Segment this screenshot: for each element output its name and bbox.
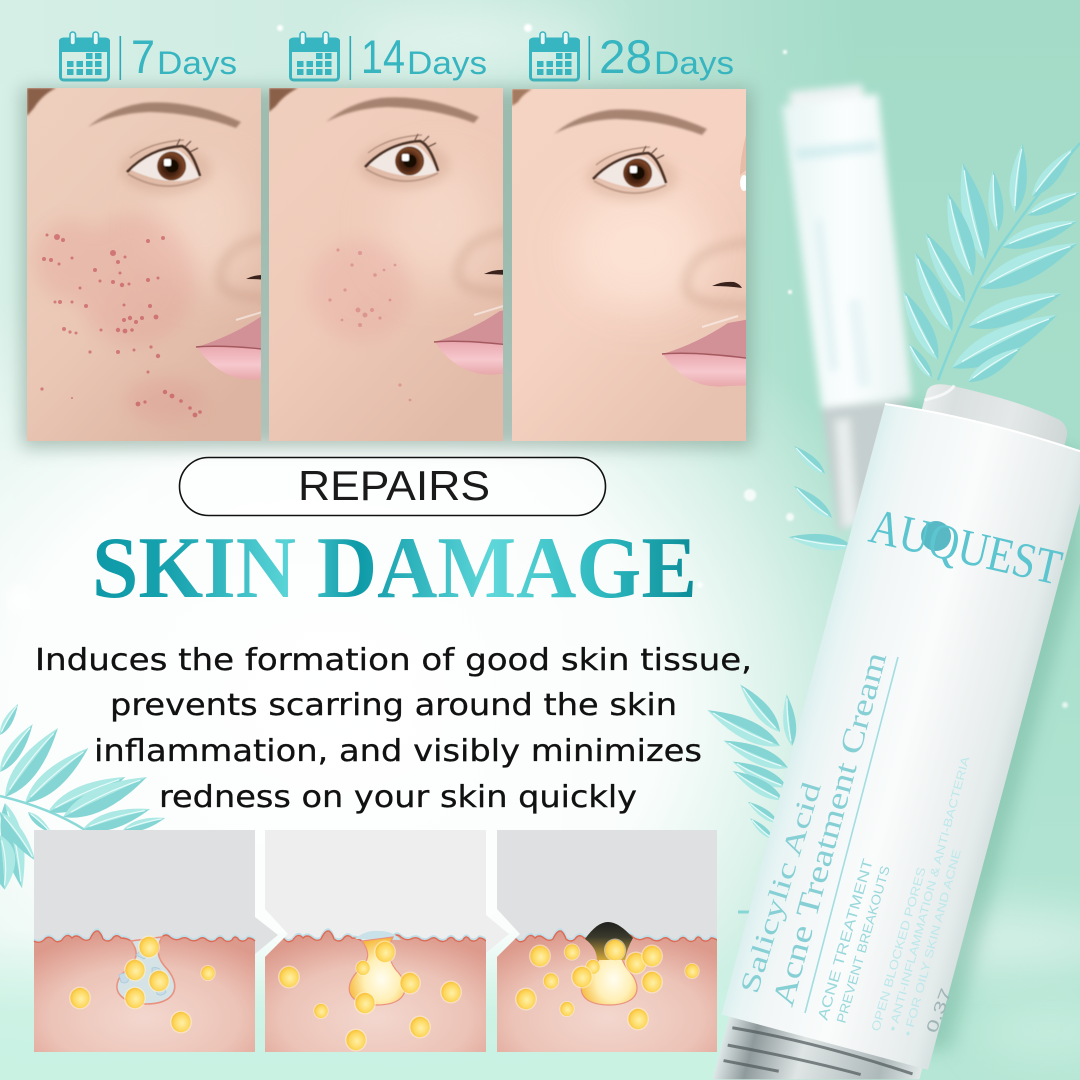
photo: 7 days, acne skin <box>27 88 261 441</box>
description text: inflammation, and visibly minimizes <box>94 734 702 769</box>
acne spots <box>40 234 202 417</box>
blurred background bottle <box>782 84 912 532</box>
bottle small text: PREVENT BREAKOUTS <box>833 864 893 1025</box>
day 14 label: Days <box>407 45 487 81</box>
bottle text: product name: Acne Treatment Cream <box>765 648 893 1010</box>
photo: 14 days, fading marks <box>269 88 503 441</box>
bottle small text: 0.37 <box>924 986 956 1035</box>
bottle text: product name <box>734 648 893 1010</box>
oil droplets <box>515 938 700 1030</box>
faded spots <box>328 248 411 401</box>
black plug <box>585 922 633 960</box>
oil droplets <box>278 940 462 1052</box>
day 14 label: 14 <box>361 30 405 83</box>
description text: redness on your skin quickly <box>159 780 637 815</box>
day 28 label: 28 <box>599 30 652 83</box>
yellow pore <box>349 937 405 1005</box>
photo: 28 days, clear skin <box>512 89 761 441</box>
leaves behind blurred bottle <box>788 442 853 554</box>
palm leaf, top right <box>895 142 1080 388</box>
day 7 label: 7 <box>131 30 155 83</box>
day 14 label <box>289 30 487 83</box>
yellow pore <box>581 937 637 1005</box>
badge: repairs: REPAIRS <box>298 462 490 509</box>
oil droplets <box>69 936 216 1034</box>
bottle small text: ACNE TREATMENT <box>815 857 877 1022</box>
logo mark <box>921 521 951 551</box>
palm leaves beside main bottle <box>703 680 798 912</box>
bottle small text: • ANTI-INFLAMMATION & ANTI-BACTERIA <box>887 755 973 1033</box>
pore filled with debris <box>117 937 175 1004</box>
badge: repairs <box>180 458 606 516</box>
bottle small text: • FOR OILY SKIN AND ACNE <box>902 848 964 1038</box>
palm leaf, lower left <box>0 702 167 891</box>
bottle small text: OPEN BLOCKED PORES <box>868 866 929 1033</box>
diagram panel 2: oil filled pore <box>265 830 509 1052</box>
bottle divider line <box>805 657 898 1013</box>
description text: Induces the formation of good skin tissue, <box>35 643 752 678</box>
description text: prevents scarring around the skin <box>110 688 677 723</box>
title: skin damage: SKIN DAMAGE <box>92 520 697 617</box>
bottle text: product name: Salicylic Acid <box>734 778 827 997</box>
day 7 label: Days <box>157 45 237 81</box>
day 28 label: Days <box>654 45 734 81</box>
main product bottle <box>705 369 1080 1080</box>
day 7 label <box>59 30 237 83</box>
diagram panel 1: clogged pore <box>34 830 278 1052</box>
description text <box>35 643 752 815</box>
photo shadow <box>22 88 752 448</box>
bottle label body <box>721 397 1080 1070</box>
bottle shadow <box>900 400 1080 1050</box>
bottle cap <box>920 379 1072 454</box>
glass base <box>712 1010 924 1080</box>
diagram panel 3: blackhead forming <box>497 830 718 1052</box>
day 28 label <box>529 30 734 83</box>
bottle small text <box>815 755 973 1038</box>
